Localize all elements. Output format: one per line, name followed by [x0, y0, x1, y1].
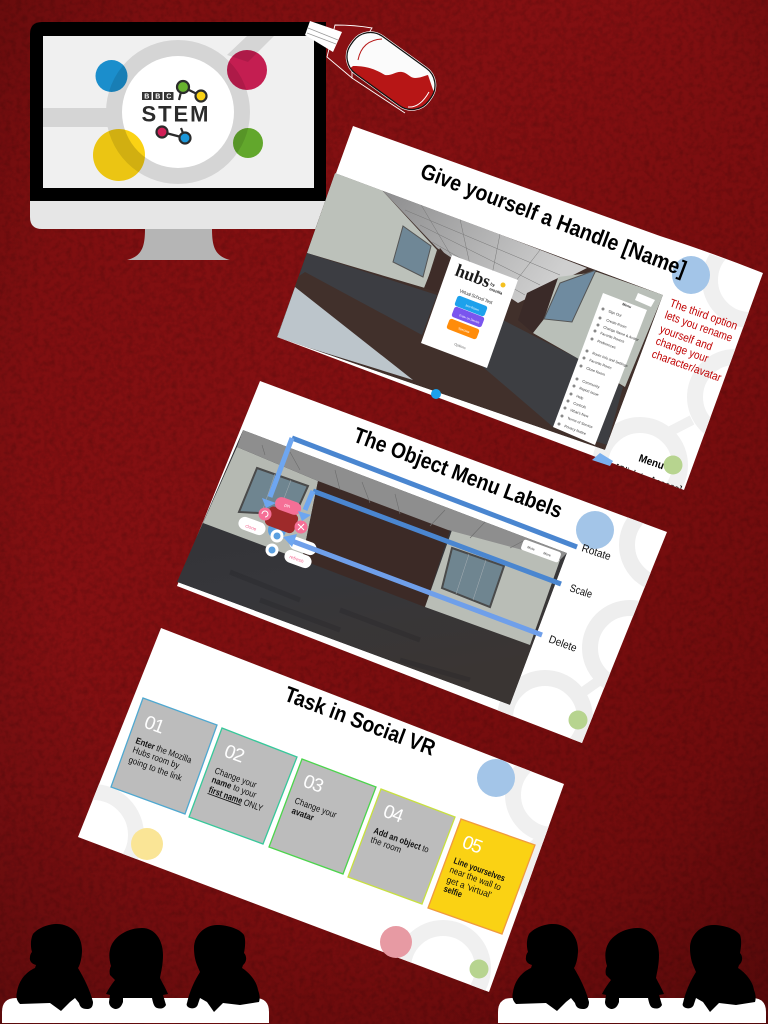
person silhouette 2 [106, 928, 168, 1009]
hubs side menu: Favorite Rooms [600, 331, 625, 344]
monitor screen graphic [43, 36, 314, 188]
hubs side menu: Help [576, 394, 584, 401]
icon: blue circle decoration [477, 759, 515, 797]
hubs side menu: Preferences [597, 339, 616, 350]
icon: green circle decoration [470, 960, 488, 978]
monitor bezel [30, 22, 326, 201]
step 02 card: first name ONLY [207, 784, 264, 813]
hubs side menu: Room Info and Settings [592, 351, 628, 368]
panel: Give yourself a Handle slide [277, 126, 768, 505]
step 03 card: Change your [293, 795, 338, 820]
text block: red instructions: character/avatar [650, 349, 723, 384]
step 05 card: near the wall to [448, 864, 502, 892]
heading: slide title: Task in Social VR [281, 681, 439, 761]
text block: menu label [616, 454, 682, 489]
hubs join dialog: Virtual School Test [458, 288, 494, 306]
top right room buttons [520, 539, 562, 563]
person silhouette 3 [187, 925, 260, 1012]
hubs side menu: Terms of Service [567, 416, 593, 429]
audience: right group at table [498, 924, 766, 1023]
room scene [177, 430, 567, 705]
bottle cap [305, 21, 342, 52]
monitor chin [30, 200, 326, 229]
hubs side menu: Sign Out [608, 309, 622, 318]
text block: arrow labels: Scale [568, 582, 594, 601]
text block: red instructions: lets you rename [663, 310, 734, 345]
icon: tilted potion bottle [305, 21, 436, 114]
arrow: delete [283, 534, 542, 635]
top right room buttons: Mute [527, 545, 535, 552]
audience: left group at table [2, 924, 269, 1023]
desktop monitor with BBC STEM logo [30, 22, 326, 260]
hubs join dialog: hubs [453, 260, 493, 291]
text block: red instructions: change your [654, 336, 710, 365]
icon: green circle decoration [568, 710, 588, 730]
hubs join dialog: by [490, 281, 496, 288]
heading: slide title: Give yourself a Handle [Name] [417, 158, 690, 281]
hubs side menu: Community [582, 379, 600, 389]
step 02 card [189, 728, 297, 844]
bottle neck [327, 25, 372, 78]
bottle side highlight [352, 78, 405, 113]
BBC STEM logo: B [144, 94, 149, 101]
hubs room scene [277, 173, 663, 450]
step 01 card: going to the link [127, 754, 184, 783]
step 03 card [269, 759, 376, 874]
hubs join dialog [421, 255, 518, 368]
hubs join dialog: Spectate [458, 326, 470, 334]
step 04 card [348, 789, 455, 904]
text block: menu label: [Click to Access] [613, 462, 683, 497]
panel: The Object Menu Labels slide [177, 381, 667, 743]
icon: blue scene button [431, 389, 441, 399]
hubs side menu: Favorite Room [589, 358, 612, 370]
icon: yellow circle decoration [131, 828, 163, 860]
decorative rings [593, 254, 749, 489]
step 03 card: avatar [290, 805, 316, 823]
person silhouette 3 [683, 925, 756, 1012]
step 02 card: 02 [221, 741, 247, 768]
step 05 card: get a 'virtual' [445, 874, 493, 900]
BBC STEM logo [142, 81, 208, 144]
hubs side menu: Close Room [586, 366, 606, 377]
bottle liquid [350, 66, 434, 109]
text block: arrow labels [547, 542, 612, 655]
icon: object with menu buttons: refresh [288, 554, 305, 565]
BBC STEM logo: C [166, 94, 171, 101]
icon: blue circle decoration [672, 256, 710, 294]
hubs join dialog: Join Room [465, 303, 480, 312]
step 03 card: 03 [300, 771, 326, 798]
icon: object with menu buttons [237, 495, 318, 570]
hubs side menu: Create Room [606, 318, 627, 329]
step 05 card [428, 819, 535, 934]
hubs side menu: Controls [573, 401, 587, 410]
hubs side menu: Change Name & Avatar [603, 325, 640, 342]
icon: object with menu buttons: clone [244, 523, 257, 533]
person silhouette 2 [602, 928, 664, 1009]
hubs side menu [553, 293, 655, 445]
text block: red instructions: The third option [668, 298, 739, 333]
icon: pink circle decoration [380, 926, 412, 958]
step 01 card: Hubs room by [131, 744, 181, 771]
step 01 card: Enter the Mozilla [134, 735, 193, 765]
arrow: scale [298, 491, 561, 584]
text block: arrow labels: Rotate [580, 542, 612, 563]
hubs join dialog: mozilla [489, 286, 504, 296]
decorative rings [92, 765, 549, 991]
table [498, 998, 766, 1023]
text block: menu label: Menu [637, 452, 666, 472]
hubs side menu: Privacy Notice [564, 424, 587, 436]
step 05 card: 05 [459, 832, 485, 859]
icon: green circle decoration [664, 456, 682, 474]
step 01 card [111, 698, 217, 814]
hubs side menu: What's New [570, 408, 589, 419]
bottle body [339, 24, 443, 118]
person silhouette 1 [512, 924, 589, 1011]
text block: red instructions: yourself and [658, 324, 714, 353]
table [2, 998, 269, 1023]
arrow: menu pointer [592, 453, 613, 466]
monitor stand [127, 228, 230, 260]
text block: red instructions [650, 298, 739, 384]
BBC STEM logo: B [155, 94, 160, 101]
step 02 card: name to your [210, 774, 258, 800]
icon: object with menu buttons: pin [284, 502, 291, 509]
text block: arrow labels: Delete [547, 634, 578, 655]
hubs join dialog: Options [454, 342, 467, 350]
hubs side menu: Menu [622, 302, 632, 309]
person silhouette 1 [16, 924, 93, 1011]
panel: Task in Social VR slide [78, 628, 564, 992]
step 04 card: 04 [380, 801, 407, 828]
heading: slide title: The Object Menu Labels [350, 422, 566, 523]
step 04 card: the room [369, 834, 403, 855]
decorative rings [498, 518, 651, 743]
step 04 card: Add an object to [372, 825, 430, 855]
step 02 card: Change your [213, 765, 258, 790]
hubs join dialog: Enter on Device [459, 313, 480, 325]
step 05 card: selfie [442, 883, 464, 899]
hubs side menu: Report Issue [579, 386, 599, 397]
step 05 card: Line yourselves [452, 855, 506, 883]
icon: blue circle decoration [576, 511, 614, 549]
arrow: rotate [262, 438, 577, 547]
BBC STEM logo: STEM [142, 102, 208, 126]
step 01 card: 01 [141, 712, 167, 739]
top right room buttons: More [543, 551, 552, 558]
